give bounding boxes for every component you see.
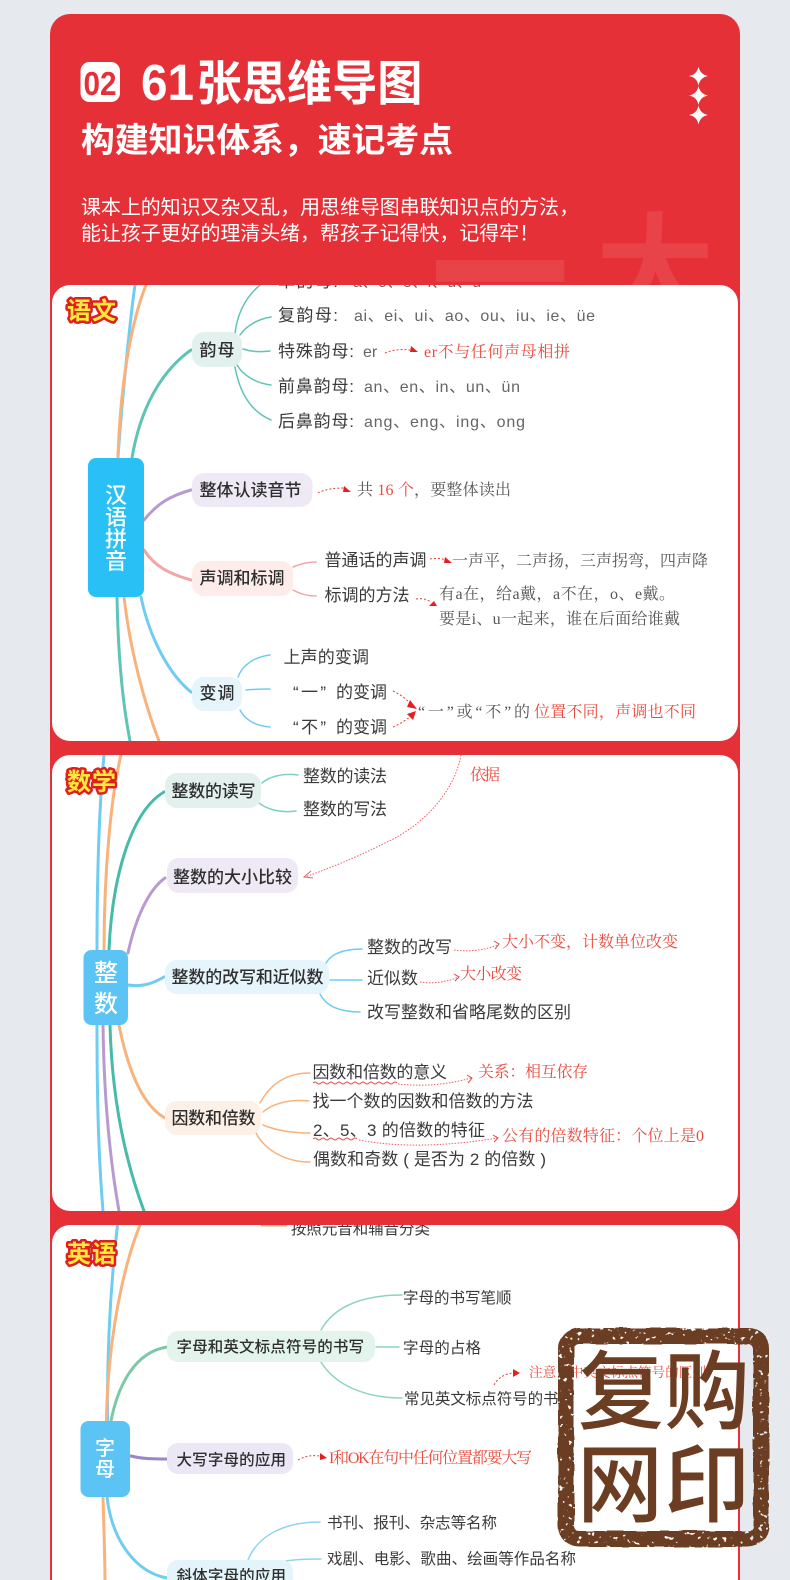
读写 sub-branches	[259, 774, 298, 812]
mind map branches: 整数	[97, 755, 165, 1211]
node: 变调	[192, 677, 242, 711]
text: 前鼻韵母: an、en、in、un、ün	[364, 379, 520, 396]
wavy underline and arrow: 意义	[313, 1075, 472, 1085]
root node: 汉语拼音: 音	[105, 549, 127, 574]
text: 一的变调: 的变调	[336, 683, 387, 702]
note: I和OK: I和OK在句中任何位置都要大写	[329, 1449, 532, 1467]
arrow: 16	[318, 486, 351, 493]
node: 声调和标调	[192, 561, 293, 596]
node: 整数的读写	[165, 773, 261, 808]
text: 复韵母	[278, 306, 594, 323]
root node: 汉语拼音: 拼	[105, 527, 127, 552]
text: 普通话的声调: 普通话的声调	[324, 551, 426, 570]
text: 前鼻韵母	[278, 377, 519, 394]
note: 依据: 依据	[470, 766, 500, 784]
label: 英语: 英语	[67, 1241, 116, 1268]
note: 四声: 一声平，二声扬，三声拐弯，四声降	[452, 551, 708, 570]
arrow: 改写	[454, 941, 499, 951]
stamp: 复购网印	[566, 1336, 761, 1539]
node: 变调: 变调	[200, 683, 234, 703]
node: 整数的大小比较	[167, 858, 298, 893]
text: 后鼻韵母: ang、eng、ing、ong	[364, 414, 525, 431]
text: 单韵母: 单韵母:	[278, 272, 338, 291]
node: 整数的改写和近似数: 整数的改写和近似数	[172, 968, 324, 987]
改写 sub-branches	[320, 949, 362, 1012]
note: 标调口诀	[439, 585, 680, 628]
node: 大写字母的应用: 大写字母的应用	[176, 1450, 286, 1469]
text: 一的变调: “一”	[293, 683, 326, 702]
text: 不的变调: 的变调	[336, 718, 387, 737]
node: 整数的改写和近似数	[165, 960, 329, 994]
root node: 整数: 数	[94, 991, 118, 1018]
声调 sub-branches	[293, 562, 316, 596]
arrow: 大写	[298, 1453, 327, 1460]
intro text	[81, 196, 579, 245]
倍数 sub-branches	[256, 1073, 310, 1162]
text: 字母的占格: 字母的占格	[403, 1339, 481, 1357]
title: 61	[141, 54, 194, 111]
watermark characters: 大	[596, 206, 714, 338]
stamp: 复购网印: 复	[578, 1345, 664, 1441]
arrow: er note	[385, 346, 418, 353]
mind map branches: 字母	[103, 1225, 286, 1580]
panel: 数学	[52, 755, 738, 1211]
note: 大小改变: 大小改变	[460, 965, 522, 983]
text: 不的变调: “不”	[293, 718, 326, 737]
text: 复韵母: 复韵母:	[278, 306, 338, 325]
title: 张思维导图	[196, 58, 422, 111]
text: 近似数: 近似数	[367, 969, 418, 988]
note: 位置不同	[418, 702, 696, 721]
node: 韵母	[192, 332, 242, 367]
node: 整数的大小比较: 整数的大小比较	[173, 868, 292, 887]
arrows: 变调 note	[393, 691, 417, 727]
root node: 汉语拼音	[88, 458, 144, 597]
intro text: 课本上的知识又杂又乱，用思维导图串联知识点的方法，	[81, 196, 579, 219]
root node: 整数: 整	[94, 960, 118, 987]
node: 整数的读写: 整数的读写	[172, 782, 256, 801]
root node: 字母: 字	[95, 1437, 115, 1460]
node: 声调和标调: 声调和标调	[200, 569, 284, 588]
note: 标调口诀: 要是i、u一起来，谁在后面给谁戴	[439, 610, 680, 628]
变调 sub-branches	[238, 655, 270, 727]
note: er: er不与任何声母相拼	[424, 342, 570, 361]
text: 一的变调	[294, 683, 386, 700]
note: 位置不同: “一”或“不”的	[418, 703, 530, 721]
watermark characters: 一	[433, 203, 567, 352]
mind map branches: 汉语拼音	[117, 285, 191, 741]
text: 整数的写法: 整数的写法	[303, 800, 387, 819]
stamp: 复购网印: 印	[664, 1438, 750, 1534]
watermark characters	[433, 203, 714, 352]
subtitle: 构建知识体系，速记考点	[81, 122, 453, 160]
text: 标调的方法: 标调的方法	[324, 586, 410, 605]
text: 单韵母: a、o、e、i、u、ü	[353, 274, 481, 291]
arrow: 依据 dashed	[304, 755, 461, 878]
text: 特殊韵母: 特殊韵母:	[278, 342, 354, 361]
text: 常见英文标点符号的书写: 常见英文标点符号的书写	[404, 1390, 574, 1408]
intro text: 能让孩子更好的理清头绪，帮孩子记得快，记得牢！	[81, 222, 539, 245]
label: 语文: 语文	[67, 297, 116, 325]
text: 上声的变调: 上声的变调	[284, 648, 369, 667]
note: 相互依存: 关系：相互依存	[478, 1063, 588, 1081]
text: 前鼻韵母: 前鼻韵母:	[278, 377, 354, 396]
node: 韵母: 韵母	[200, 341, 234, 360]
panel: 英语	[52, 1220, 738, 1580]
note: 个位上是0: 公有的倍数特征：个位上是0	[502, 1127, 704, 1145]
root node: 字母	[80, 1421, 130, 1497]
label: 数学: 数学	[67, 769, 116, 796]
node: 字母和英文标点符号的书写: 字母和英文标点符号的书写	[176, 1337, 364, 1356]
arrow: 近似	[420, 974, 459, 983]
node: 字母和英文标点符号的书写	[167, 1331, 375, 1362]
wavy underline and arrow: 特征	[313, 1135, 498, 1145]
stamp: 复购网印: 购	[664, 1345, 750, 1441]
斜体 sub-branches	[248, 1522, 321, 1561]
node: 大写字母的应用	[167, 1443, 293, 1474]
text: 偶数和奇数: 偶数和奇数 ( 是否为 2 的倍数 )	[313, 1150, 546, 1169]
text: 找因数: 找一个数的因数和倍数的方法	[312, 1092, 534, 1111]
text: 整数的读法: 整数的读法	[303, 767, 387, 786]
note: 标调口诀: 有a在，给a戴，a不在，o、e戴。	[439, 585, 675, 603]
node: 整体认读音节: 整体认读音节	[200, 480, 302, 500]
note: 大小不变: 大小不变，计数单位改变	[502, 933, 678, 951]
node: 因数和倍数	[165, 1101, 261, 1135]
text: 后鼻韵母: 后鼻韵母:	[278, 412, 354, 431]
arrow: 标点	[494, 1369, 520, 1385]
text: 整数的改写: 整数的改写	[367, 938, 452, 957]
text: 按照元音和辅音分类: 按照元音和辅音分类	[291, 1220, 430, 1238]
node: 斜体字母的应用	[167, 1560, 293, 1580]
text: 改写整数: 改写整数和省略尾数的区别	[367, 1003, 571, 1022]
text: 书刊: 书刊、报刊、杂志等名称	[327, 1514, 497, 1532]
root node: 字母: 母	[95, 1459, 115, 1481]
note: 注意: 注意：中英文标点符号的区别	[529, 1364, 706, 1380]
text: 字母的书写笔顺: 字母的书写笔顺	[403, 1289, 512, 1307]
root node: 汉语拼音: 汉	[105, 483, 127, 508]
number badge: 02	[84, 65, 116, 102]
note: 位置不同: 位置不同，声调也不同	[534, 702, 696, 721]
text: 单韵母	[278, 285, 480, 288]
arrow: 标调	[416, 599, 437, 606]
text: 特殊韵母	[278, 342, 377, 359]
text: 不的变调	[294, 718, 386, 735]
arrow: 声调	[430, 557, 452, 563]
text: 复韵母: ai、ei、ui、ao、ou、iu、ie、üe	[354, 308, 595, 325]
text: 戏剧: 戏剧、电影、歌曲、绘画等作品名称	[327, 1550, 576, 1568]
text: 因数和倍数的意义: 因数和倍数的意义	[312, 1063, 447, 1082]
icon: sparkle stars	[689, 66, 708, 124]
root node: 整数	[84, 950, 128, 1025]
root node: 汉语拼音: 语	[105, 505, 127, 530]
note: 16: 共 16 个，要整体读出	[357, 480, 511, 499]
text: 后鼻韵母	[278, 412, 525, 431]
韵母 sub-branches	[235, 285, 271, 420]
text: 倍数特征: 2、5、3 的倍数的特征	[313, 1121, 485, 1140]
text: 特殊韵母: er	[363, 344, 378, 361]
node: 因数和倍数: 因数和倍数	[172, 1108, 256, 1128]
书写 sub-branches	[321, 1295, 402, 1398]
stamp: 复购网印: 网	[577, 1438, 663, 1534]
panel: 语文	[52, 272, 738, 741]
node: 整体认读音节	[192, 473, 312, 507]
